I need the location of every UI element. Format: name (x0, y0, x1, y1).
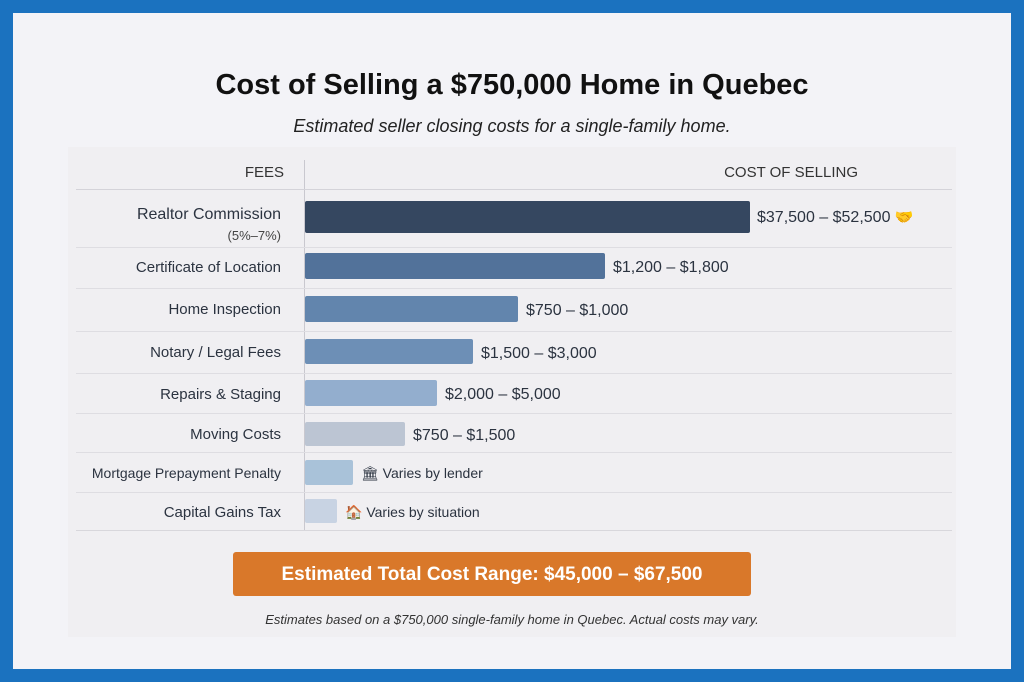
row: capital gains (164, 499, 480, 523)
panel: chart (68, 147, 956, 637)
row: home inspection (168, 296, 628, 322)
row: notary (150, 339, 597, 364)
text: Certificate of Location (136, 259, 281, 276)
total callout (233, 552, 751, 596)
text: $2,000 – $5,000 (445, 386, 561, 403)
text: $750 – $1,500 (413, 427, 515, 444)
text: Mortgage Prepayment Penalty (92, 465, 281, 481)
text: 🏛 Varies by lender (361, 465, 483, 481)
row: certificate of location (136, 253, 729, 279)
text: $1,200 – $1,800 (613, 259, 729, 276)
text: Realtor Commission (137, 206, 281, 223)
subtitle: Estimated seller closing costs for a single-family home. (293, 116, 731, 136)
text: (5%–7%) (228, 228, 281, 243)
row: mortgage (92, 460, 483, 485)
text: Repairs & Staging (160, 386, 281, 403)
row: realtor commission (137, 201, 914, 243)
text: Moving Costs (190, 426, 281, 443)
text: $1,500 – $3,000 (481, 345, 597, 362)
text: $37,500 – $52,500 🤝 (757, 209, 914, 226)
text: Home Inspection (168, 301, 281, 318)
row: repairs (160, 380, 561, 406)
total callout: Estimated Total Cost Range: $45,000 – $67,500 (282, 564, 702, 585)
header: cost of selling: COST OF SELLING (724, 164, 858, 181)
title: Cost of Selling a $750,000 Home in Quebec (215, 69, 809, 101)
text: $750 – $1,000 (526, 302, 628, 319)
text: 🏠 Varies by situation (345, 504, 480, 520)
footnote: Estimates based on a $750,000 single-family home in Quebec. Actual costs may vary. (265, 612, 759, 627)
text: Notary / Legal Fees (150, 344, 281, 361)
text: Capital Gains Tax (164, 504, 281, 521)
header: fees: FEES (245, 164, 284, 181)
row: moving (190, 422, 515, 446)
